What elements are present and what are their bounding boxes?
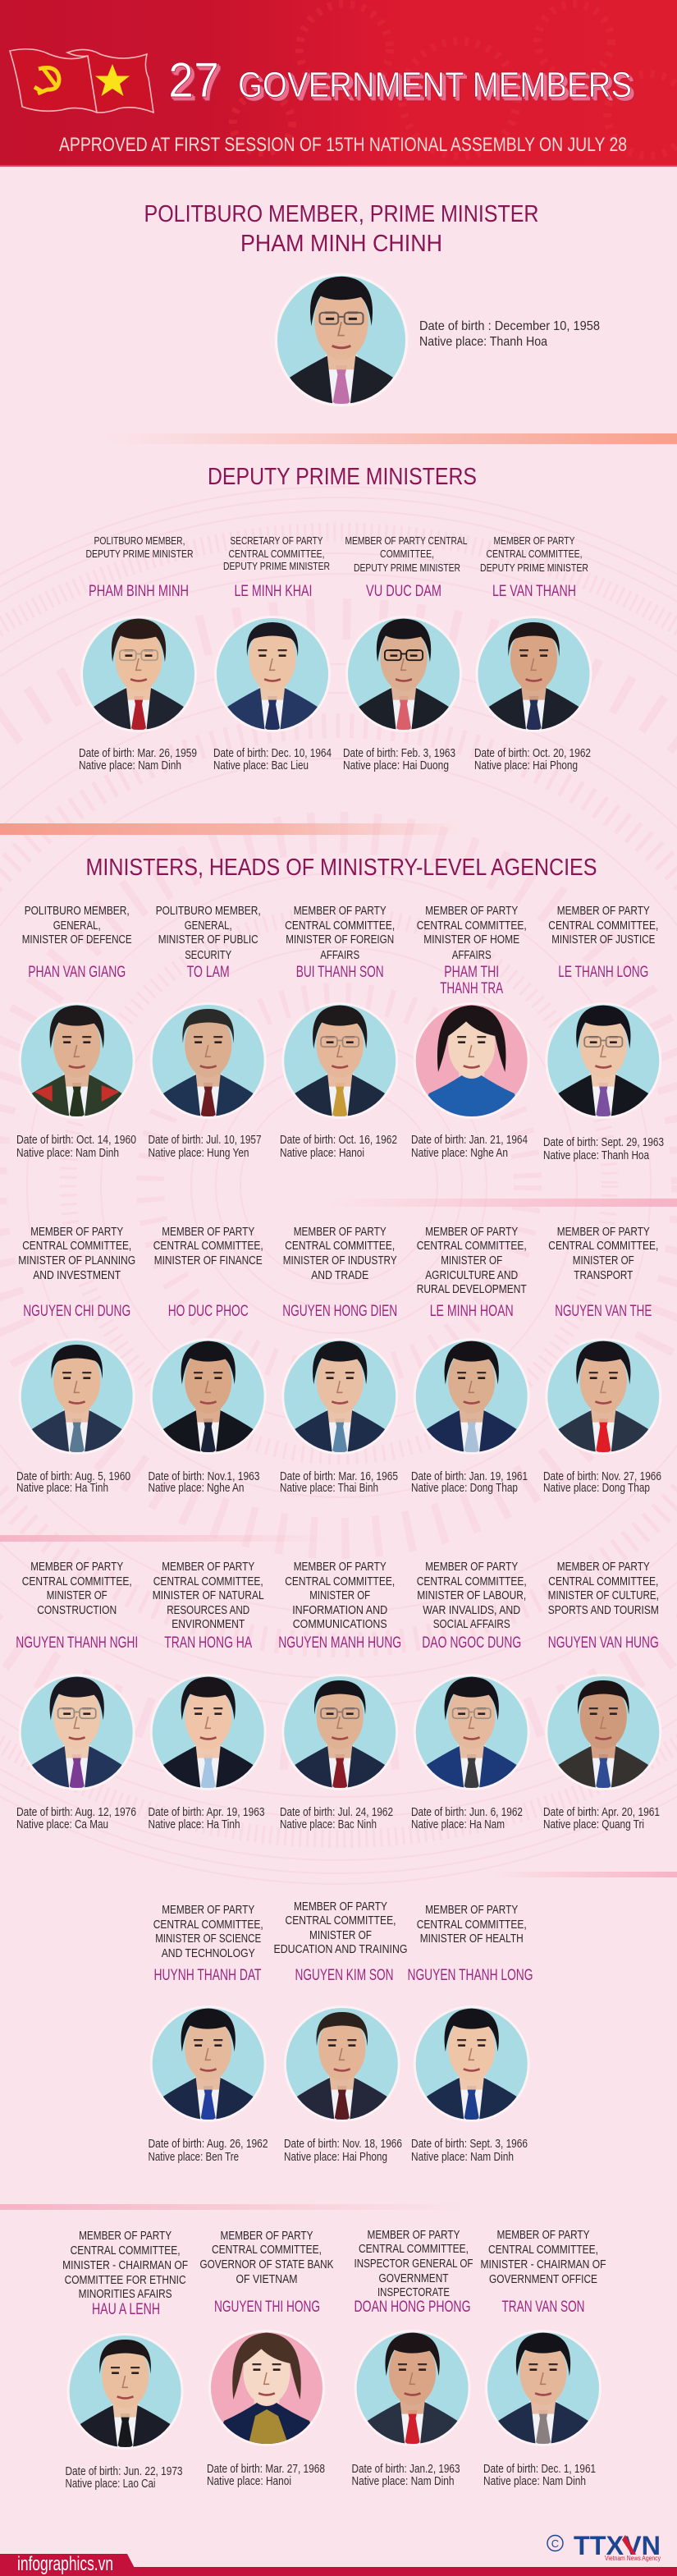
person: Le Van Thanh: Native place: Hai Phong bbox=[474, 759, 578, 772]
birth details bbox=[419, 319, 600, 349]
person: Dao Ngoc Dung: Native place: Ha Nam bbox=[411, 1818, 505, 1831]
person: Bui Thanh Son: AFFAIRS bbox=[320, 949, 359, 962]
person: Nguyen Thi Hong: Date of birth: Mar. 27, 1968 bbox=[207, 2463, 325, 2476]
person: Nguyen Kim Son: NGUYEN KIM SON bbox=[295, 1967, 394, 1984]
person: Nguyen Thanh Nghi: NGUYEN THANH NGHI bbox=[16, 1634, 138, 1652]
person: Phan Van Giang: POLITBURO MEMBER, bbox=[25, 905, 130, 918]
person: Ho Duc Phoc: MEMBER OF PARTY bbox=[162, 1226, 254, 1239]
person: Nguyen Thi Hong bbox=[200, 2230, 334, 2488]
person: Hau A Lenh: MINORITIES AFAIRS bbox=[79, 2288, 172, 2301]
person: Vu Duc Dam: Date of birth: Feb. 3, 1963 bbox=[343, 747, 455, 760]
person: Bui Thanh Son: BUI THANH SON bbox=[296, 964, 384, 981]
person: Le Minh Hoan: CENTRAL COMMITTEE, bbox=[417, 1240, 527, 1253]
person: Nguyen Hong Dien: CENTRAL COMMITTEE, bbox=[285, 1240, 395, 1253]
person: Le Thanh Long bbox=[543, 905, 664, 1162]
person: Le Minh Hoan: Native place: Dong Thap bbox=[411, 1482, 518, 1495]
person: Doan Hong Phong: INSPECTOR GENERAL OF bbox=[355, 2257, 473, 2271]
person: Dao Ngoc Dung bbox=[411, 1561, 530, 1831]
person: Pham Binh Minh: Date of birth: Mar. 26, 1959 bbox=[79, 747, 197, 760]
person: Tran Van Son bbox=[481, 2229, 606, 2488]
person: Hau A Lenh: MINISTER - CHAIRMAN OF bbox=[62, 2259, 188, 2272]
divider band bbox=[0, 1535, 328, 1542]
person: Hau A Lenh bbox=[62, 2230, 188, 2491]
person: Tran Hong Ha: TRAN HONG HA bbox=[164, 1634, 252, 1652]
person: Pham Binh Minh: PHAM BINH MINH bbox=[89, 583, 189, 600]
person: Le Minh Hoan bbox=[411, 1226, 530, 1495]
person: Nguyen Thanh Long: CENTRAL COMMITTEE, bbox=[417, 1918, 527, 1932]
person: Nguyen Chi Dung: MINISTER OF PLANNING bbox=[18, 1254, 135, 1267]
person: Doan Hong Phong: INSPECTORATE bbox=[377, 2286, 450, 2299]
person: Le Minh Hoan: MEMBER OF PARTY bbox=[425, 1226, 518, 1239]
person: To Lam: SECURITY bbox=[185, 949, 231, 962]
person: To Lam: Date of birth: Jul. 10, 1957 bbox=[148, 1134, 261, 1147]
birth details: Date of birth : December 10, 1958 bbox=[419, 319, 600, 333]
person: Le Thanh Long: Native place: Thanh Hoa bbox=[543, 1149, 650, 1162]
person: Pham Binh Minh: DEPUTY PRIME MINISTER bbox=[85, 548, 194, 560]
logo: TTXVN: Vietnam News Agency bbox=[605, 2555, 661, 2562]
person: Pham Thi Thanh Tra: MEMBER OF PARTY bbox=[425, 905, 518, 918]
person: Huynh Thanh Dat: CENTRAL COMMITTEE, bbox=[153, 1918, 263, 1932]
person: Dao Ngoc Dung: WAR INVALIDS, AND bbox=[423, 1604, 520, 1617]
person: Nguyen Hong Dien: NGUYEN HONG DIEN bbox=[282, 1303, 397, 1320]
person: Nguyen Manh Hung: MEMBER OF PARTY bbox=[294, 1561, 387, 1574]
person: Le Minh Hoan: AGRICULTURE AND bbox=[425, 1269, 518, 1282]
title: GOVERNMENT MEMBERS bbox=[238, 65, 632, 105]
person: Pham Binh Minh: POLITBURO MEMBER, bbox=[94, 534, 185, 547]
person: Tran Hong Ha: Date of birth: Apr. 19, 1963 bbox=[148, 1806, 264, 1819]
person: Le Minh Hoan: Date of birth: Jan. 19, 1961 bbox=[411, 1470, 528, 1483]
person: Nguyen Chi Dung: MEMBER OF PARTY bbox=[30, 1226, 123, 1239]
person: Nguyen Van The: MEMBER OF PARTY bbox=[557, 1226, 650, 1239]
person: Pham Thi Thanh Tra: PHAM THI bbox=[444, 964, 499, 981]
person: Nguyen Hong Dien: MEMBER OF PARTY bbox=[294, 1226, 387, 1239]
person: To Lam: MINISTER OF PUBLIC bbox=[158, 933, 258, 947]
person: Nguyen Thanh Nghi: Date of birth: Aug. 12, 1976 bbox=[16, 1806, 136, 1819]
person: Nguyen Van Hung bbox=[543, 1561, 661, 1831]
person: Tran Van Son: Native place: Nam Dinh bbox=[483, 2475, 586, 2488]
person: Dao Ngoc Dung: MINISTER OF LABOUR, bbox=[417, 1589, 526, 1602]
person: Tran Hong Ha: MEMBER OF PARTY bbox=[162, 1561, 254, 1574]
heading: deputy prime ministers: DEPUTY PRIME MINISTERS bbox=[208, 464, 477, 490]
person: Nguyen Kim Son bbox=[274, 1900, 407, 2164]
person: Nguyen Chi Dung: AND INVESTMENT bbox=[33, 1269, 121, 1282]
person: Nguyen Hong Dien: AND TRADE bbox=[311, 1269, 368, 1282]
person: Huynh Thanh Dat: Date of birth: Aug. 26, 1962 bbox=[148, 2138, 268, 2151]
person: Nguyen Manh Hung: Native place: Bac Ninh bbox=[280, 1818, 377, 1831]
footer tab: infographics.vn bbox=[17, 2553, 113, 2575]
person: Nguyen Kim Son: MEMBER OF PARTY bbox=[294, 1900, 387, 1914]
person: Nguyen Thanh Nghi: MEMBER OF PARTY bbox=[30, 1561, 123, 1574]
person: Tran Van Son: TRAN VAN SON bbox=[502, 2299, 584, 2316]
person: Nguyen Kim Son: CENTRAL COMMITTEE, bbox=[286, 1914, 396, 1927]
person: Pham Thi Thanh Tra bbox=[411, 905, 530, 1160]
person: Tran Van Son: MEMBER OF PARTY bbox=[497, 2229, 590, 2242]
divider band bbox=[0, 2204, 468, 2210]
person: Dao Ngoc Dung: Date of birth: Jun. 6, 1962 bbox=[411, 1806, 523, 1819]
person: Hau A Lenh: CENTRAL COMMITTEE, bbox=[71, 2244, 181, 2257]
person: To Lam: GENERAL, bbox=[185, 919, 232, 933]
header banner bbox=[0, 0, 677, 167]
person: Tran Van Son: MINISTER - CHAIRMAN OF bbox=[481, 2258, 606, 2271]
person: Ho Duc Phoc: CENTRAL COMMITTEE, bbox=[153, 1240, 263, 1253]
person: Nguyen Hong Dien: Native place: Thai Binh bbox=[280, 1482, 378, 1495]
divider band bbox=[328, 1199, 677, 1207]
person: Nguyen Thi Hong: CENTRAL COMMITTEE, bbox=[212, 2244, 322, 2257]
person: Nguyen Chi Dung bbox=[16, 1226, 135, 1495]
person: Nguyen Van Hung: MEMBER OF PARTY bbox=[557, 1561, 650, 1574]
person: Pham Thi Thanh Tra: MINISTER OF HOME bbox=[423, 933, 519, 947]
person: Bui Thanh Son: MEMBER OF PARTY bbox=[294, 905, 387, 918]
person: Le Minh Khai: CENTRAL COMMITTEE, bbox=[228, 548, 325, 560]
person: Vu Duc Dam: COMMITTEE, bbox=[380, 548, 434, 560]
person: Nguyen Chi Dung: CENTRAL COMMITTEE, bbox=[22, 1240, 131, 1253]
person: Le Minh Hoan: RURAL DEVELOPMENT bbox=[417, 1283, 527, 1296]
person: Nguyen Van The: MINISTER OF bbox=[573, 1254, 634, 1267]
title bbox=[168, 53, 632, 108]
person: Pham Binh Minh: Native place: Nam Dinh bbox=[79, 759, 181, 772]
person: Bui Thanh Son: Native place: Hanoi bbox=[280, 1147, 364, 1160]
person: Bui Thanh Son: MINISTER OF FOREIGN bbox=[286, 933, 394, 947]
person: Nguyen Thanh Nghi: CONSTRUCTION bbox=[37, 1604, 117, 1617]
person: Hau A Lenh: COMMITTEE FOR ETHNIC bbox=[65, 2274, 186, 2287]
person: Dao Ngoc Dung: MEMBER OF PARTY bbox=[425, 1561, 518, 1574]
person: Le Van Thanh: DEPUTY PRIME MINISTER bbox=[480, 561, 588, 574]
person: Nguyen Thanh Long: NGUYEN THANH LONG bbox=[407, 1967, 533, 1984]
panel: ministers row 3 bbox=[16, 1561, 661, 1831]
person: Ho Duc Phoc: HO DUC PHOC bbox=[168, 1303, 249, 1320]
person: Hau A Lenh: MEMBER OF PARTY bbox=[79, 2230, 172, 2243]
person: Doan Hong Phong: Native place: Nam Dinh bbox=[351, 2475, 455, 2488]
person: Nguyen Chi Dung: Date of birth: Aug. 5, 1960 bbox=[16, 1470, 130, 1483]
panel: ministers row 1 bbox=[16, 905, 664, 1162]
person: Dao Ngoc Dung: SOCIAL AFFAIRS bbox=[433, 1618, 510, 1631]
person: Tran Hong Ha: RESOURCES AND bbox=[167, 1604, 249, 1617]
person: Phan Van Giang: MINISTER OF DEFENCE bbox=[22, 933, 132, 947]
icon: national flag bbox=[67, 49, 153, 112]
panel: prime minister bbox=[144, 201, 600, 408]
person: Nguyen Thanh Nghi bbox=[16, 1561, 138, 1831]
person: Nguyen Kim Son: MINISTER OF bbox=[309, 1929, 372, 1942]
person: Phan Van Giang: Native place: Nam Dinh bbox=[16, 1147, 119, 1160]
person: Bui Thanh Son: Date of birth: Oct. 16, 1962 bbox=[280, 1134, 397, 1147]
person: Tran Hong Ha: Native place: Ha Tinh bbox=[148, 1818, 240, 1831]
person: Nguyen Thanh Long: MINISTER OF HEALTH bbox=[420, 1932, 524, 1946]
person: Phan Van Giang: PHAN VAN GIANG bbox=[28, 964, 126, 981]
person: Phan Van Giang: Date of birth: Oct. 14, 1960 bbox=[16, 1134, 136, 1147]
heading: prime minister: PHAM MINH CHINH bbox=[240, 231, 442, 257]
person: Le Van Thanh bbox=[474, 534, 592, 772]
person: Nguyen Kim Son: Native place: Hai Phong bbox=[284, 2151, 387, 2164]
person: Pham Thi Thanh Tra: AFFAIRS bbox=[452, 949, 492, 962]
person: Le Minh Khai: Native place: Bac Lieu bbox=[213, 759, 309, 772]
title: 27 bbox=[168, 53, 219, 108]
person: Le Van Thanh: LE VAN THANH bbox=[492, 583, 576, 600]
person: To Lam: POLITBURO MEMBER, bbox=[156, 905, 261, 918]
person: Tran Hong Ha bbox=[148, 1561, 267, 1831]
person: Nguyen Hong Dien: Date of birth: Mar. 16, 1965 bbox=[280, 1470, 398, 1483]
person: Vu Duc Dam: Native place: Hai Duong bbox=[343, 759, 449, 772]
person: Nguyen Thanh Long bbox=[407, 1904, 533, 2164]
person: Nguyen Manh Hung: NGUYEN MANH HUNG bbox=[278, 1634, 401, 1652]
person: Ho Duc Phoc: Native place: Nghe An bbox=[148, 1482, 245, 1495]
panel: ministers row 2 bbox=[16, 1226, 661, 1495]
person: Bui Thanh Son: CENTRAL COMMITTEE, bbox=[285, 919, 395, 933]
person: Le Minh Khai: SECRETARY OF PARTY bbox=[230, 534, 323, 547]
person: Doan Hong Phong bbox=[351, 2229, 473, 2488]
person: Nguyen Van The: TRANSPORT bbox=[574, 1269, 633, 1282]
person: Pham Thi Thanh Tra: Date of birth: Jan. 21, 1964 bbox=[411, 1134, 528, 1147]
person: Le Minh Hoan: MINISTER OF bbox=[441, 1254, 502, 1267]
person: Huynh Thanh Dat bbox=[148, 1904, 268, 2164]
person: Nguyen Manh Hung: INFORMATION AND bbox=[292, 1604, 387, 1617]
person: Nguyen Thanh Nghi: Native place: Ca Mau bbox=[16, 1818, 108, 1831]
divider band bbox=[492, 1872, 677, 1877]
person: Nguyen Chi Dung: Native place: Ha Tinh bbox=[16, 1482, 108, 1495]
heading: prime minister: POLITBURO MEMBER, PRIME MINISTER bbox=[144, 201, 538, 227]
person: Pham Thi Thanh Tra: CENTRAL COMMITTEE, bbox=[417, 919, 527, 933]
person: Dao Ngoc Dung: CENTRAL COMMITTEE, bbox=[417, 1575, 527, 1588]
person: Nguyen Thi Hong: MEMBER OF PARTY bbox=[220, 2230, 313, 2243]
person: Nguyen Kim Son: Date of birth: Nov. 18, 1966 bbox=[284, 2138, 402, 2151]
person: Le Minh Khai: LE MINH KHAI bbox=[235, 583, 312, 600]
person: Pham Thi Thanh Tra: Native place: Nghe An bbox=[411, 1147, 508, 1160]
divider band bbox=[0, 823, 460, 835]
person: Huynh Thanh Dat: MEMBER OF PARTY bbox=[162, 1904, 254, 1917]
person: Le Minh Khai: DEPUTY PRIME MINISTER bbox=[223, 560, 330, 572]
person: Doan Hong Phong: DOAN HONG PHONG bbox=[355, 2299, 471, 2316]
person: Tran Hong Ha: MINISTER OF NATURAL bbox=[153, 1589, 264, 1602]
person: Tran Van Son: Date of birth: Dec. 1, 1961 bbox=[483, 2463, 596, 2476]
person: Doan Hong Phong: MEMBER OF PARTY bbox=[368, 2229, 460, 2242]
person: To Lam bbox=[148, 905, 267, 1160]
person: Nguyen Thi Hong: Native place: Hanoi bbox=[207, 2475, 291, 2488]
icon: party flag bbox=[10, 49, 97, 112]
person: Nguyen Kim Son: EDUCATION AND TRAINING bbox=[274, 1943, 407, 1956]
person: Doan Hong Phong: GOVERNMENT bbox=[379, 2272, 449, 2285]
person: Nguyen Hong Dien: MINISTER OF INDUSTRY bbox=[283, 1254, 397, 1267]
person: Ho Duc Phoc: MINISTER OF FINANCE bbox=[154, 1254, 263, 1267]
person: Vu Duc Dam: VU DUC DAM bbox=[366, 583, 441, 600]
person: Dao Ngoc Dung: DAO NGOC DUNG bbox=[422, 1634, 521, 1652]
person: To Lam: Native place: Hung Yen bbox=[148, 1147, 249, 1160]
person: Nguyen Manh Hung: MINISTER OF bbox=[309, 1589, 370, 1602]
person: Hau A Lenh: HAU A LENH bbox=[92, 2301, 160, 2318]
person: Nguyen Thanh Long: Date of birth: Sept. 3, 1966 bbox=[411, 2138, 528, 2151]
person: Hau A Lenh: Date of birth: Jun. 22, 1973 bbox=[66, 2465, 182, 2478]
person: Le Minh Khai: Date of birth: Dec. 10, 1964 bbox=[213, 747, 332, 760]
person: Nguyen Chi Dung: NGUYEN CHI DUNG bbox=[23, 1303, 130, 1320]
person: Tran Hong Ha: ENVIRONMENT bbox=[172, 1618, 245, 1631]
person: Doan Hong Phong: Date of birth: Jan.2, 1963 bbox=[351, 2463, 460, 2476]
panel: ministers row 5 bbox=[62, 2229, 606, 2491]
person: Nguyen Van Hung: Native place: Quang Tri bbox=[543, 1818, 644, 1831]
person: Nguyen Manh Hung: COMMUNICATIONS bbox=[293, 1618, 387, 1631]
panel: deputy prime ministers bbox=[79, 464, 592, 772]
person: Nguyen Thi Hong: OF VIETNAM bbox=[236, 2273, 297, 2286]
person: Le Van Thanh: CENTRAL COMMITTEE, bbox=[486, 548, 583, 560]
heading: prime minister bbox=[144, 201, 538, 257]
person: Tran Van Son: CENTRAL COMMITTEE, bbox=[488, 2244, 598, 2257]
person: Ho Duc Phoc bbox=[148, 1226, 267, 1495]
person: Le Van Thanh: Date of birth: Oct. 20, 1962 bbox=[474, 747, 591, 760]
person: Pham Binh Minh bbox=[79, 534, 197, 772]
person: Le Van Thanh: MEMBER OF PARTY bbox=[494, 534, 575, 547]
person: Bui Thanh Son bbox=[280, 905, 398, 1160]
person: Nguyen Thanh Long: MEMBER OF PARTY bbox=[425, 1904, 518, 1917]
person: Tran Hong Ha: CENTRAL COMMITTEE, bbox=[153, 1575, 263, 1588]
person: Nguyen Manh Hung bbox=[278, 1561, 401, 1831]
person: Doan Hong Phong: CENTRAL COMMITTEE, bbox=[359, 2243, 469, 2256]
person: Nguyen Hong Dien bbox=[280, 1226, 398, 1495]
heading: ministers: MINISTERS, HEADS OF MINISTRY-LEVEL AGENCIES bbox=[85, 855, 597, 881]
person: Huynh Thanh Dat: AND TECHNOLOGY bbox=[162, 1947, 255, 1960]
person: Ho Duc Phoc: Date of birth: Nov.1, 1963 bbox=[148, 1470, 259, 1483]
person: Hau A Lenh: Native place: Lao Cai bbox=[66, 2477, 156, 2491]
person: Nguyen Thanh Nghi: MINISTER OF bbox=[47, 1589, 107, 1602]
person: Phan Van Giang bbox=[16, 905, 136, 1160]
footer bbox=[0, 2531, 677, 2576]
person: Nguyen Thi Hong: NGUYEN THI HONG bbox=[214, 2299, 320, 2316]
person: Le Thanh Long: MEMBER OF PARTY bbox=[557, 905, 650, 918]
person: Nguyen Manh Hung: CENTRAL COMMITTEE, bbox=[285, 1575, 395, 1588]
person: Nguyen Thi Hong: GOVERNOR OF STATE BANK bbox=[200, 2258, 334, 2271]
person: Tran Van Son: GOVERNMENT OFFICE bbox=[489, 2273, 597, 2286]
person: Vu Duc Dam bbox=[343, 534, 468, 772]
person: Nguyen Manh Hung: Date of birth: Jul. 24, 1962 bbox=[280, 1806, 393, 1819]
logo: TTXVN: C bbox=[551, 2537, 559, 2550]
birth details: Native place: Thanh Hoa bbox=[419, 335, 547, 349]
person: Nguyen Van The bbox=[543, 1226, 661, 1495]
person: Le Minh Hoan: LE MINH HOAN bbox=[430, 1303, 514, 1320]
person: Vu Duc Dam: DEPUTY PRIME MINISTER bbox=[354, 561, 460, 574]
person: Phan Van Giang: GENERAL, bbox=[53, 919, 101, 933]
person: Nguyen Thanh Nghi: CENTRAL COMMITTEE, bbox=[22, 1575, 132, 1588]
person: Nguyen Van The: Native place: Dong Thap bbox=[543, 1482, 650, 1495]
person: Huynh Thanh Dat: Native place: Ben Tre bbox=[148, 2151, 239, 2164]
divider band bbox=[107, 433, 677, 444]
panel: ministers row 4 bbox=[148, 1900, 533, 2164]
person: Nguyen Thanh Long: Native place: Nam Dinh bbox=[411, 2151, 514, 2164]
person: To Lam: TO LAM bbox=[187, 964, 230, 981]
person: Le Minh Khai bbox=[213, 534, 332, 772]
person: Pham Thi Thanh Tra: THANH TRA bbox=[440, 980, 503, 997]
person: Huynh Thanh Dat: HUYNH THANH DAT bbox=[154, 1967, 262, 1984]
logo: TTXVN: TTXVN bbox=[574, 2531, 661, 2560]
photo: Pham Minh Chinh bbox=[275, 273, 408, 408]
person: Vu Duc Dam: MEMBER OF PARTY CENTRAL bbox=[345, 534, 468, 547]
person: Huynh Thanh Dat: MINISTER OF SCIENCE bbox=[155, 1932, 261, 1946]
